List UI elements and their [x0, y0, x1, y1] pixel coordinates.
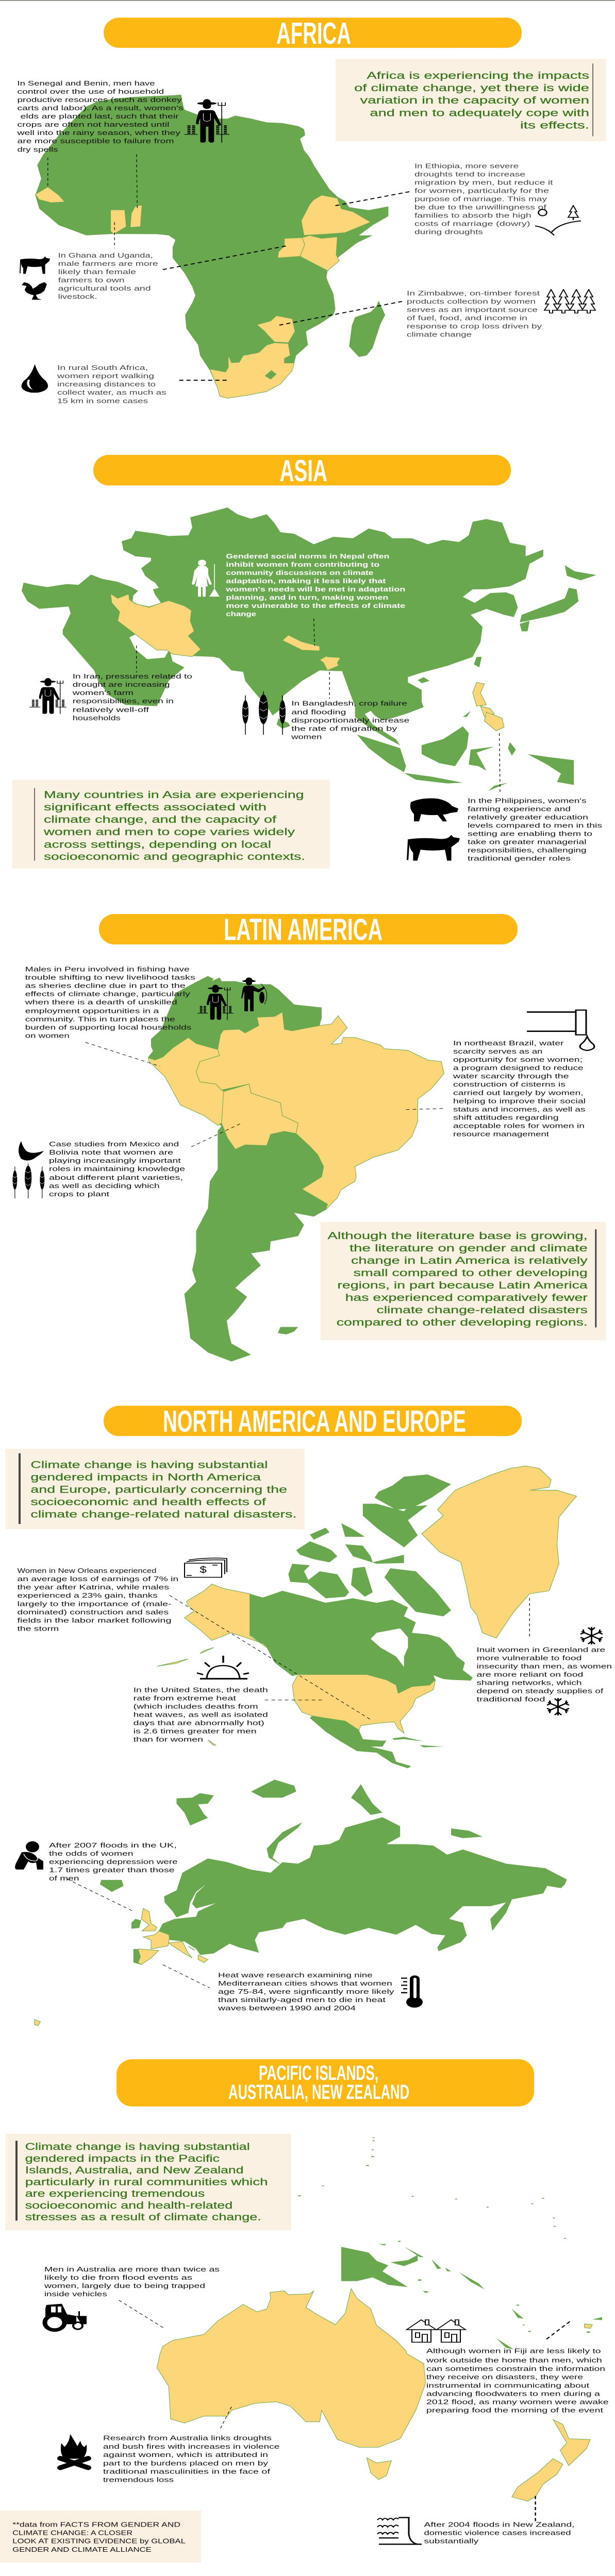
text: Fiji: instrumental in communicating about: [426, 2382, 590, 2389]
text: Ethiopia: families to absorb the high: [414, 212, 531, 219]
text: Zimbabwe: In Zimbabwe, on-timber forest: [407, 290, 540, 297]
text: Greenland: sharing networks, which: [476, 1680, 581, 1687]
text: New Zealand: domestic violence cases increased: [424, 2530, 571, 2537]
section banner: Africa: AFRICA: [276, 16, 351, 50]
text: UK floods: of men: [49, 1875, 79, 1882]
text: Bangladesh: disproportionately increase: [291, 717, 409, 724]
text: Iran: In Iran, pressures related to: [73, 673, 192, 681]
section banner: Latin America: [99, 912, 518, 946]
icon: rising sun: [197, 1656, 249, 1679]
callout: Asia summary: [12, 780, 330, 869]
text: Philippines: farming experience and: [468, 805, 571, 813]
text: Nepal: community discussions on climate: [226, 569, 373, 577]
icon: snowflake: [580, 1627, 603, 1645]
callout: Africa summary: variation in the capacity of women: [360, 95, 589, 106]
icon: wheat: [12, 1163, 44, 1198]
text: Philippines: traditional gender roles: [468, 855, 571, 862]
icon: money stack: $: [200, 1565, 207, 1575]
text: Mediterranean heat waves: than similarly-aged men to die in heat: [218, 1996, 386, 2004]
text: Nepal: adaptation, making it less likely that: [226, 578, 386, 585]
text: Nepal: women's needs will be met in adaptation: [225, 586, 405, 594]
leader line: Zimbabwe: [279, 301, 402, 325]
text: Australia floods: likely to die from flood events as: [44, 2274, 192, 2282]
panel: Africa: [16, 16, 606, 405]
callout: Latin America summary: [321, 1222, 606, 1340]
text: northeast Brazil: a program designed to reduce: [453, 1064, 584, 1072]
text: New Zealand: [424, 2521, 574, 2545]
icon: cow: [407, 835, 460, 860]
icon: flood wall: [377, 2518, 422, 2544]
callout: Asia summary: significant effects associated with: [44, 802, 267, 812]
text: Peru: trouble shifting to new livelihood tasks: [25, 974, 195, 981]
icon: farmer: [197, 985, 234, 1020]
text: Ghana and Uganda: farmers to own: [58, 277, 125, 284]
leader line: United States: [265, 1700, 324, 1701]
leader line: Ghana: [114, 222, 115, 248]
callout: data source: **data from FACTS FROM GENDER AND: [12, 2521, 180, 2529]
text: Zimbabwe: [407, 290, 542, 338]
text: South Africa: collect water, as much as: [57, 389, 166, 396]
icon: houses: [407, 2320, 466, 2342]
leader line: Uganda: [163, 246, 287, 269]
text: Nepal: Gendered social norms in Nepal often: [226, 553, 389, 561]
text: Australia bush fires: and bush fires with increases in violence: [103, 2443, 279, 2450]
callout: North America and Europe summary: [6, 1449, 305, 1529]
text: Fiji: can sometimes constrain the information: [426, 2365, 605, 2372]
callout: Latin America summary: climate change-related disasters: [376, 1304, 588, 1315]
icon: forest: [544, 290, 595, 313]
map: North America and Greenland: [157, 1466, 577, 1768]
text: New Orleans: largely to the importance of (male-: [18, 1600, 171, 1608]
callout: Latin America summary: small compared to other developing: [354, 1267, 588, 1278]
icon: fire: [60, 2434, 88, 2468]
leader line: Iran: [136, 646, 137, 673]
text: New Zealand: After 2004 floods in New Zealand,: [424, 2521, 574, 2529]
icon: banana leaf: [19, 1141, 44, 1161]
text: northeast Brazil: status and incomes, as well as: [453, 1106, 585, 1113]
text: Australia bush fires: against women, which is attributed in: [103, 2451, 268, 2459]
text: Ghana and Uganda: [58, 252, 158, 301]
text: Nepal: planning, and in turn, making women: [226, 594, 388, 602]
text: Greenland: [476, 1646, 612, 1703]
callout: Pacific summary: socioeconomic and health-related: [25, 2200, 232, 2211]
callout: Africa summary: [336, 59, 606, 141]
leader line: South Africa: [179, 380, 229, 381]
text: Australia floods: women, largely due to being trapped: [44, 2282, 205, 2290]
text: northeast Brazil: opportunity for some women;: [453, 1056, 583, 1063]
icon: farmer: [29, 678, 67, 714]
text: Ethiopia: In Ethiopia, more severe: [414, 162, 519, 170]
callout: data source: GENDER AND CLIMATE ALLIANCE: [12, 2546, 152, 2553]
section banner: Pacific Islands, Australia, New Zealand: PACIFIC ISLANDS,: [259, 2061, 378, 2084]
text: Ghana and Uganda: In Ghana and Uganda,: [58, 252, 153, 259]
callout: Africa summary: and men to adequately cope with: [370, 107, 589, 118]
icon: woman with broom: [192, 560, 220, 597]
text: Peru: Males in Peru involved in fishing have: [25, 965, 190, 973]
panel: Pacific Islands, Australia, New Zealand: [0, 2059, 609, 2563]
text: Mexico and Bolivia: Case studies from Mexico and: [49, 1141, 179, 1148]
icon: depressed person: [15, 1841, 43, 1870]
text: United States: days that are abnormally hot): [134, 1719, 264, 1727]
text: Greenland: traditional food: [476, 1696, 545, 1703]
map: Africa: [35, 95, 388, 398]
callout: Latin America summary: compared to other developing regions.: [337, 1317, 588, 1328]
icon: money stack: [185, 1558, 227, 1578]
callout: Africa summary: its effects.: [520, 120, 589, 131]
text: Australia floods: Men in Australia are more than twice as: [44, 2266, 220, 2274]
callout: Pacific summary: are experiencing tremendous: [25, 2188, 205, 2199]
leader line: New Zealand: [535, 2496, 536, 2521]
text: Iran: women's farm: [72, 689, 134, 697]
callout: Asia summary: climate change, and the capacity of: [44, 814, 277, 825]
text: Senegal and Benin: are more susceptible to failure from: [18, 138, 174, 145]
text: Mexico and Bolivia: [49, 1141, 185, 1198]
top edge strip: [0, 0, 615, 1]
text: Peru: community. This in turn places the: [25, 1015, 175, 1023]
text: Philippines: levels compared to men in this: [468, 822, 602, 829]
text: Philippines: setting are enabling them to: [468, 830, 592, 838]
text: United States: heat waves, as well as isolated: [134, 1711, 268, 1719]
text: Ethiopia: be due to the unwillingness of: [414, 204, 547, 211]
text: Greenland: are more reliant on food: [476, 1671, 583, 1679]
callout: Asia summary: socioeconomic and geographic contexts.: [44, 851, 305, 862]
text: Nepal: inhibit women from contributing to: [226, 561, 379, 569]
icon: cow: [20, 257, 50, 274]
callout: Pacific summary: stresses as a result of climate change.: [25, 2211, 261, 2223]
text: Peru: burden of supporting local households: [25, 1024, 191, 1031]
callout: Latin America summary: Although the literature base is growing,: [327, 1230, 588, 1241]
text: Nepal: [225, 553, 405, 618]
leader line: Australia floods: [119, 2300, 163, 2328]
text: Fiji: preparing food the morning of the event: [426, 2406, 604, 2414]
text: South Africa: increasing distances to: [57, 381, 156, 388]
text: Ghana and Uganda: male farmers are more: [58, 260, 158, 267]
text: UK floods: experiencing depression were: [49, 1858, 178, 1866]
text: Fiji: [426, 2347, 609, 2414]
text: New Orleans: dominated) construction and sales: [18, 1608, 169, 1616]
text: Senegal and Benin: crops are often not harvested until: [18, 121, 170, 128]
text: New Orleans: experienced a 23% gain, thanks: [18, 1592, 158, 1600]
text: South Africa: [57, 364, 166, 405]
text: Iran: relatively well-off: [73, 706, 149, 714]
text: northeast Brazil: resource management: [453, 1130, 550, 1138]
text: New Zealand: substantially: [424, 2538, 479, 2545]
text: northeast Brazil: scarcity serves as an: [453, 1048, 542, 1056]
map: Europe and Russia: [35, 1780, 567, 2026]
callout: Asia summary: women and men to cope varies widely: [43, 826, 295, 837]
text: Mexico and Bolivia: crops to plant: [49, 1191, 110, 1198]
text: Philippines: take on greater managerial: [468, 838, 586, 846]
callout: Africa summary: Africa is experiencing the impacts: [367, 70, 589, 81]
icon: pig: [410, 799, 458, 821]
text: United States: is 2.6 times greater for men: [134, 1727, 257, 1735]
leader line: Senegal: [47, 158, 48, 188]
text: Australia bush fires: Research from Australia links droughts: [103, 2434, 272, 2442]
text: Senegal and Benin: control over the use of household: [18, 88, 164, 95]
text: Ethiopia: droughts tend to increase: [414, 171, 525, 178]
text: Peru: effects of climate change, particularly: [25, 991, 190, 998]
text: Mexico and Bolivia: roles in maintaining knowledge: [49, 1165, 185, 1173]
text: Mexico and Bolivia: Bolivia note that women are: [49, 1149, 173, 1156]
text: Greenland: depend on steady supplies of: [476, 1688, 604, 1695]
icon: snowflake: [547, 1698, 569, 1716]
text: Philippines: In the Philippines, women's: [468, 797, 587, 805]
text: Mediterranean heat waves: waves between 1990 and 2004: [218, 2005, 356, 2012]
text: New Orleans: Women in New Orleans experienced: [18, 1567, 157, 1575]
text: Peru: on women: [25, 1032, 70, 1040]
callout: North America and Europe summary: climate change-related natural disasters.: [30, 1509, 296, 1520]
text: Australia floods: [44, 2266, 220, 2298]
leader line: New Orleans: [170, 1595, 371, 1720]
panel: North America and Europe: [6, 1404, 612, 2026]
text: Bangladesh: In Bangladesh, crop failure: [291, 700, 407, 707]
text: northeast Brazil: construction of cisterns is: [453, 1081, 566, 1088]
text: Mediterranean heat waves: Mediterranean cities shows that women: [218, 1980, 392, 1988]
text: New Orleans: fields in the labor market following: [18, 1617, 171, 1624]
text: Iran: households: [73, 715, 121, 722]
callout: Pacific summary: gendered impacts in the Pacific: [25, 2153, 220, 2164]
callout: data source: [0, 2511, 201, 2563]
section banner: Asia: [93, 453, 511, 488]
text: Fiji: advancing floodwaters to men during a: [426, 2390, 601, 2398]
text: northeast Brazil: In northeast Brazil, water: [453, 1040, 564, 1047]
text: New Orleans: the year after Katrina, while males: [18, 1584, 169, 1591]
text: Fiji: Although women in Fiji are less likely to: [426, 2347, 601, 2355]
leader line: Greenland: [529, 1598, 530, 1637]
text: United States: [134, 1686, 268, 1743]
text: Philippines: relatively greater education: [468, 814, 588, 821]
icon: rooster: [22, 282, 47, 300]
text: Peru: when there is a dearth of unskilled: [24, 999, 177, 1006]
text: Greenland: insecurity than men, as women: [476, 1663, 612, 1670]
text: Australia bush fires: traditional masculinities in the face of: [103, 2468, 271, 2476]
text: Bangladesh: women: [291, 733, 322, 741]
text: Mexico and Bolivia: about different plant varieties,: [49, 1174, 183, 1181]
icon: hill, sun and tree: [535, 206, 581, 235]
text: Philippines: responsibilities, challenging: [468, 846, 586, 854]
text: Senegal and Benin: elds are planted last, such that their: [21, 113, 179, 120]
text: Senegal and Benin: carts and labor). As a result, women's: [18, 105, 184, 112]
text: Mexico and Bolivia: playing increasingly important: [49, 1157, 181, 1165]
callout: Latin America summary: has experienced comparatively fewer: [345, 1292, 588, 1303]
text: New Orleans: an average loss of earnings of 7% in: [18, 1575, 178, 1583]
text: Bangladesh: [291, 700, 409, 741]
text: Peru: [24, 965, 195, 1040]
text: northeast Brazil: acceptable roles for women in: [453, 1122, 585, 1130]
text: Mediterranean heat waves: Heat wave research examining nine: [218, 1972, 373, 1979]
text: Ethiopia: for women, particularly for the: [414, 187, 549, 195]
icon: fisherman: [241, 977, 267, 1011]
callout: Asia summary: Many countries in Asia are experiencing: [44, 789, 304, 800]
text: South Africa: 15 km in some cases: [57, 397, 148, 405]
text: Fiji: 2012 flood, as many women were awake: [426, 2398, 609, 2406]
text: United States: (which includes deaths from: [134, 1703, 258, 1710]
callout: North America and Europe summary: and Europe, particularly concerning the: [30, 1484, 287, 1495]
map: South America: [148, 976, 444, 1362]
text: Senegal and Benin: dry spells: [18, 146, 58, 154]
text: northeast Brazil: water scarcity through the: [453, 1073, 569, 1080]
text: Zimbabwe: serves as an important source: [407, 306, 538, 314]
text: United States: rate from extreme heat: [134, 1694, 237, 1702]
callout: Africa summary: of climate change, yet there is wide: [354, 82, 589, 93]
text: Philippines: [468, 797, 602, 862]
text: Ghana and Uganda: likely than female: [58, 268, 136, 276]
leader line: Bangladesh: [329, 672, 330, 699]
text: Australia bush fires: tremendous loss: [103, 2476, 174, 2484]
text: Peru: as sheries decline due in part to the: [25, 982, 186, 990]
icon: farmer: [185, 99, 229, 143]
text: northeast Brazil: carried out largely by women,: [453, 1089, 584, 1097]
icon: thermometer: [401, 1975, 423, 2008]
text: northeast Brazil: helping to improve their social: [453, 1097, 586, 1105]
callout: North America and Europe summary: Climate change is having substantial: [30, 1459, 268, 1470]
text: Nepal: more vulnerable to the effects of climate: [226, 602, 405, 610]
callout: Latin America summary: change in Latin America is relatively: [351, 1255, 588, 1266]
text: Zimbabwe: products collection by women: [407, 298, 536, 306]
text: Fiji: work outside the home than men, which: [426, 2357, 602, 2364]
callout: data source: LOOK AT EXISTING EVIDENCE by GLOBAL: [12, 2538, 186, 2545]
callout: Latin America summary: the literature on gender and climate: [350, 1243, 588, 1253]
text: Senegal and Benin: [16, 80, 183, 154]
section banner: Pacific Islands, Australia, New Zealand: AUSTRALIA, NEW ZEALAND: [228, 2080, 409, 2104]
text: Australia floods: inside vehicles: [44, 2291, 107, 2298]
text: Senegal and Benin: well into the rainy season, when they: [16, 129, 181, 137]
text: Nepal: change: [226, 611, 256, 618]
text: South Africa: In rural South Africa,: [57, 364, 148, 371]
icon: wheat: [242, 691, 286, 735]
icon: water pipe and drop: [527, 1010, 594, 1050]
section banner: Pacific Islands, Australia, New Zealand: [117, 2059, 534, 2107]
text: Ethiopia: migration by men, but reduce it: [414, 179, 554, 187]
text: Fiji: they receive on disasters, they were: [426, 2374, 583, 2381]
text: Zimbabwe: climate change: [407, 331, 472, 338]
text: UK floods: [49, 1842, 178, 1882]
text: New Orleans: [18, 1567, 178, 1633]
text: Ethiopia: [414, 162, 554, 236]
text: Iran: responsibilities, even in: [73, 698, 174, 705]
text: Mediterranean heat waves: age 75-84, were signficantly more likely: [218, 1988, 394, 1996]
text: Zimbabwe: of fuel, food, and income in: [407, 314, 527, 322]
callout: data source: CLIMATE CHANGE: A CLOSER: [12, 2530, 132, 2537]
text: New Orleans: the storm: [18, 1625, 59, 1633]
icon: water drop: [22, 364, 48, 393]
text: Ethiopia: during droughts: [414, 228, 483, 236]
callout: Pacific summary: particularly in rural communities which: [25, 2176, 268, 2188]
text: Australia bush fires: part to the burdens placed on men by: [103, 2460, 269, 2467]
text: Ghana and Uganda: agricultural tools and: [58, 285, 151, 292]
text: Zimbabwe: response to crop loss driven by: [407, 323, 542, 330]
callout: Pacific summary: [6, 2134, 291, 2230]
leader line: Mediterranean: [163, 1964, 210, 1988]
leader line: UK: [67, 1879, 134, 1911]
text: Greenland: Inuit women in Greenland are: [476, 1646, 605, 1654]
text: Australia bush fires: [103, 2434, 279, 2484]
map: Oceania: [157, 2137, 602, 2501]
text: UK floods: 1.7 times greater than those: [49, 1867, 174, 1874]
text: Mediterranean heat waves: [218, 1972, 394, 2012]
text: Senegal and Benin: productive resources (such as donkey: [18, 96, 182, 104]
text: United States: than for women: [134, 1736, 203, 1743]
text: UK floods: the odds of women: [49, 1850, 134, 1857]
callout: Latin America summary: regions, in part because Latin America: [337, 1280, 588, 1291]
leader line: Brazil: [406, 1109, 445, 1110]
leader line: Bolivia: [191, 1124, 240, 1147]
panel: Latin America: [12, 912, 606, 1362]
section banner: Latin America: LATIN AMERICA: [224, 912, 383, 946]
text: Bangladesh: and flooding: [291, 708, 346, 716]
text: northeast Brazil: [453, 1040, 586, 1138]
text: Senegal and Benin: In Senegal and Benin, men have: [18, 80, 155, 87]
leader line: Australia bush fires: [220, 2407, 231, 2430]
leader line: Ethiopia: [336, 191, 411, 206]
text: Ethiopia: costs of marriage (dowry): [414, 220, 530, 228]
callout: Pacific summary: Islands, Australia, and New Zealand: [25, 2165, 244, 2176]
callout: Pacific summary: Climate change is having substantial: [25, 2141, 250, 2152]
text: Iran: [72, 673, 192, 722]
section banner: Africa: [104, 16, 522, 50]
leader line: Fiji: [546, 2321, 571, 2339]
section banner: Asia: ASIA: [279, 453, 327, 488]
text: South Africa: women report walking: [57, 372, 154, 380]
text: northeast Brazil: shift attitudes regarding: [453, 1114, 559, 1122]
callout: North America and Europe summary: socioeconomic and health effects of: [30, 1496, 267, 1507]
text: Mexico and Bolivia: as well as deciding which: [49, 1182, 160, 1190]
text: Bangladesh: the rate of migration by: [291, 725, 397, 733]
callout: North America and Europe summary: gendered impacts in North America: [30, 1471, 261, 1483]
text: Ghana and Uganda: livestock.: [58, 293, 97, 301]
text: Iran: drought are increasing: [73, 681, 170, 689]
text: UK floods: After 2007 floods in the UK,: [49, 1842, 177, 1849]
text: Peru: employment opportunities in a: [25, 1007, 159, 1015]
map: Asia: [22, 507, 596, 791]
callout: Asia summary: across settings, depending on local: [44, 839, 271, 850]
text: United States: In the United States, the death: [134, 1686, 268, 1694]
panel: Asia: [12, 453, 602, 869]
leader line: Peru: [86, 1042, 160, 1066]
icon: tractor: [45, 2304, 87, 2330]
text: Ethiopia: purpose of marriage. This may: [414, 195, 547, 203]
text: Greenland: more vulnerable to food: [476, 1654, 581, 1662]
